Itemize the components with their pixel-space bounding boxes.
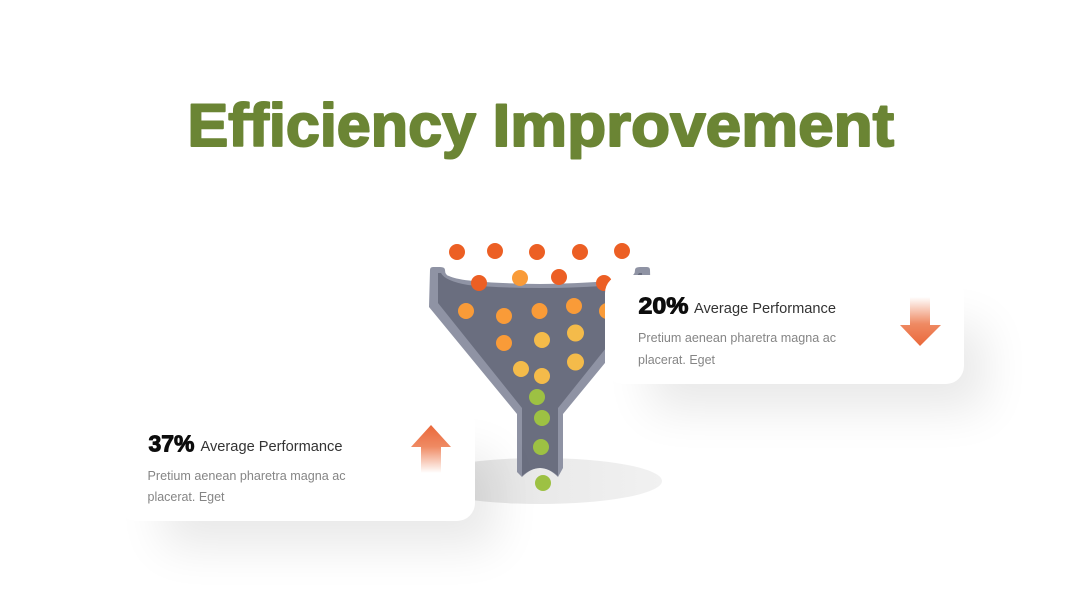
description: placerat. Eget: [148, 489, 225, 504]
percentage: 20%: [638, 292, 689, 318]
funnel ground shadow: [418, 458, 662, 504]
funnel dots: yellow: [513, 324, 584, 384]
card: 20% average performance: [605, 275, 964, 384]
description: Pretium aenean pharetra magna ac: [638, 330, 836, 345]
icon: down arrow: [900, 297, 941, 346]
title: Efficiency: [188, 92, 477, 159]
percentage: 37%: [148, 430, 195, 456]
funnel body: [429, 267, 651, 477]
funnel dots: green: [529, 389, 551, 491]
heading: Average Performance: [200, 438, 342, 455]
title: [188, 92, 894, 160]
card: 37% average performance: [118, 405, 475, 521]
icon: up arrow: [411, 425, 451, 473]
falling dots: red row: [449, 243, 630, 291]
funnel dots: orange: [458, 270, 615, 351]
title: Improvement: [492, 92, 894, 159]
description: placerat. Eget: [638, 352, 715, 367]
description: [638, 330, 836, 367]
description: Pretium aenean pharetra magna ac: [148, 468, 346, 483]
heading: Average Performance: [694, 300, 836, 317]
description: [148, 468, 346, 504]
